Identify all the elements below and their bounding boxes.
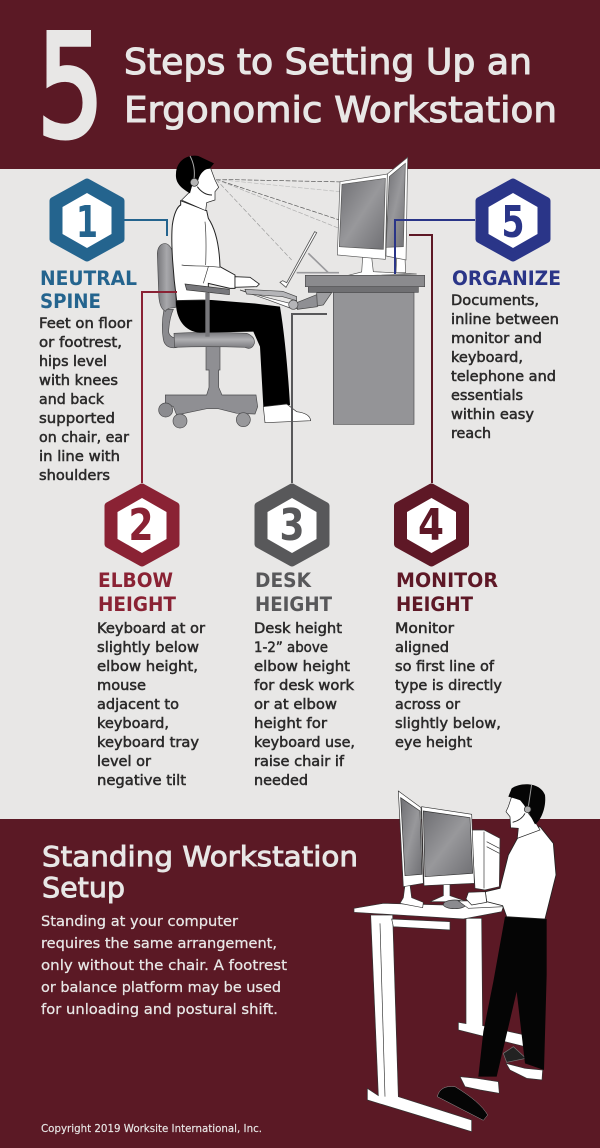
heading: SPINE: [40, 290, 101, 313]
body text: elbow height: [254, 659, 351, 675]
icon: hexagon 4: [398, 488, 465, 562]
chair: [157, 244, 258, 428]
body text: [97, 621, 205, 789]
heading: NEUTRAL: [40, 267, 137, 290]
desk: [305, 275, 425, 424]
body text: height for: [254, 716, 327, 732]
standing workstation heading: [42, 840, 358, 904]
icon: hexagon 2: 2: [128, 500, 154, 551]
seated workstation illustration: [157, 156, 425, 428]
body text: [39, 316, 132, 484]
body text: level or: [97, 754, 151, 770]
standing workstation text: or balance platform may be used: [41, 980, 281, 996]
body text: hips level: [39, 354, 107, 370]
title: Steps to Setting Up an: [124, 42, 532, 83]
body text: for desk work: [254, 678, 355, 694]
body text: slightly below,: [395, 716, 501, 732]
body text: monitor and: [451, 331, 542, 347]
document holder: [280, 232, 339, 287]
standing workstation text: Standing at your computer: [41, 914, 238, 930]
body text: in line with: [39, 449, 120, 465]
footrest: [437, 1047, 526, 1120]
standing workstation text: for unloading and postural shift.: [41, 1002, 278, 1018]
icon: hexagon 5: 5: [502, 197, 524, 248]
icon: hexagon 4: 4: [418, 500, 444, 551]
body text: keyboard tray: [97, 735, 199, 751]
icon: hexagon 1: 1: [76, 197, 98, 248]
heading: [255, 569, 333, 616]
heading: HEIGHT: [396, 593, 474, 616]
title: Ergonomic Workstation: [124, 90, 557, 131]
body text: mouse: [97, 678, 146, 694]
body text: 1-2” above: [254, 640, 328, 656]
person standing: [460, 784, 556, 1093]
title: 5: [37, 5, 104, 170]
body text: slightly below: [97, 640, 199, 656]
body text: keyboard use,: [254, 735, 355, 751]
heading: [40, 267, 137, 313]
body text: inline between: [451, 312, 559, 328]
heading: [98, 569, 177, 616]
standing workstation illustration: [354, 784, 556, 1132]
icon: hexagon 2: [108, 488, 176, 562]
step 1: neutral spine: [39, 182, 137, 484]
body text: so first line of: [395, 659, 495, 675]
body text: Desk height: [254, 621, 343, 637]
heading: MONITOR: [396, 569, 498, 592]
title: [37, 5, 557, 170]
step 5: organize: [451, 182, 561, 442]
monitors and tower: [398, 791, 503, 909]
copyright: Copyright 2019 Worksite International, Inc.: [41, 1123, 262, 1135]
body text: Monitor: [395, 621, 454, 637]
body text: eye height: [395, 735, 473, 751]
body text: adjacent to: [97, 697, 179, 713]
footer band: [0, 819, 600, 1148]
heading: HEIGHT: [255, 593, 333, 616]
body text: and back: [39, 392, 105, 408]
body text: on chair, ear: [39, 430, 129, 446]
body text: aligned: [395, 640, 449, 656]
icon: hexagon 3: 3: [280, 500, 304, 551]
standing workstation heading: Standing Workstation: [42, 840, 358, 873]
step 3: desk height: [254, 488, 355, 789]
icon: hexagon 3: [258, 488, 326, 562]
body text: Keyboard at or: [97, 621, 205, 637]
body text: across or: [395, 697, 460, 713]
connector lines: [124, 220, 475, 483]
body text: or at elbow: [254, 697, 337, 713]
person seated: [172, 156, 311, 423]
body text: needed: [254, 773, 308, 789]
body text: or footrest,: [39, 335, 122, 351]
standing workstation heading: Setup: [42, 871, 125, 904]
body text: negative tilt: [97, 773, 187, 789]
icon: hexagon 5: [480, 182, 546, 258]
heading: HEIGHT: [98, 593, 177, 616]
body text: [395, 621, 502, 751]
body text: essentials: [451, 388, 523, 404]
body text: supported: [39, 411, 115, 427]
dual monitors: [337, 157, 417, 275]
keyboard tray: [240, 289, 332, 309]
body text: keyboard,: [97, 716, 169, 732]
body text: elbow height,: [97, 659, 198, 675]
body text: keyboard,: [451, 350, 523, 366]
body text: Documents,: [451, 293, 539, 309]
body text: with knees: [39, 373, 118, 389]
standing workstation text: requires the same arrangement,: [41, 936, 277, 952]
icon: hexagon 1: [54, 182, 120, 258]
body text: [451, 293, 559, 442]
heading: ORGANIZE: [452, 267, 561, 290]
body text: telephone and: [451, 369, 556, 385]
body text: [254, 621, 355, 789]
sight lines: [216, 179, 378, 260]
step 4: monitor height: [395, 488, 502, 751]
header band: [0, 0, 600, 169]
heading: ELBOW: [98, 569, 173, 592]
standing desk: [354, 903, 525, 1132]
heading: [396, 569, 498, 616]
body text: Feet on floor: [39, 316, 132, 332]
body text: shoulders: [39, 468, 110, 484]
body text: raise chair if: [254, 754, 345, 770]
body text: type is directly: [395, 678, 502, 694]
step 2: elbow height: [97, 488, 205, 789]
heading: DESK: [255, 569, 312, 592]
body text: within easy: [451, 407, 534, 423]
standing workstation text: only without the chair. A footrest: [41, 958, 287, 974]
standing workstation text: [41, 914, 287, 1018]
body text: reach: [451, 426, 491, 442]
